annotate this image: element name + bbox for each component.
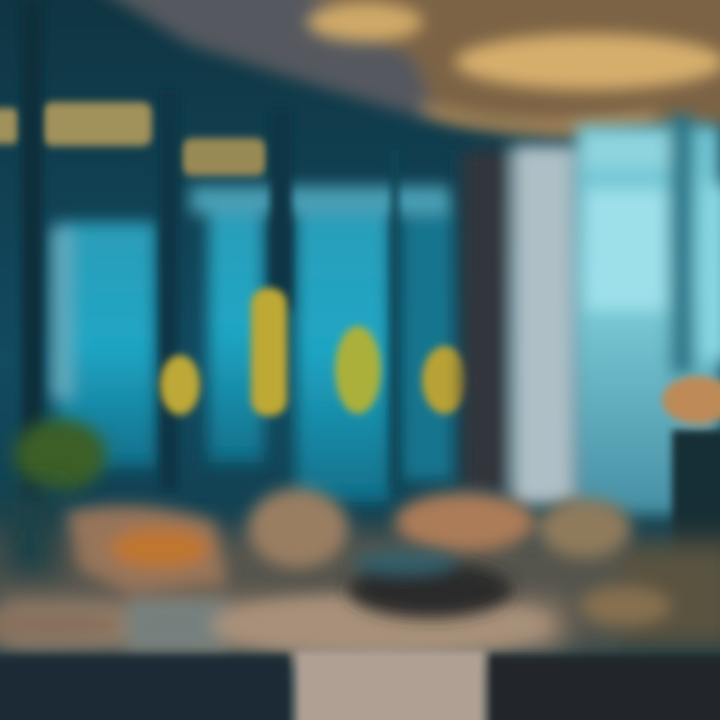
curtain and right window	[462, 115, 720, 515]
dark columns	[22, 0, 399, 520]
ceiling lights	[307, 2, 720, 133]
sofas and chairs	[0, 488, 671, 655]
foreground dark furniture	[0, 650, 720, 720]
right lamp	[662, 376, 720, 560]
ceiling	[85, 0, 720, 135]
gold wall bands	[0, 102, 266, 176]
round table	[348, 550, 512, 618]
lounge floor	[0, 490, 720, 655]
plant	[14, 419, 106, 491]
yellow accents	[160, 288, 468, 416]
cyan window panels	[50, 186, 454, 502]
